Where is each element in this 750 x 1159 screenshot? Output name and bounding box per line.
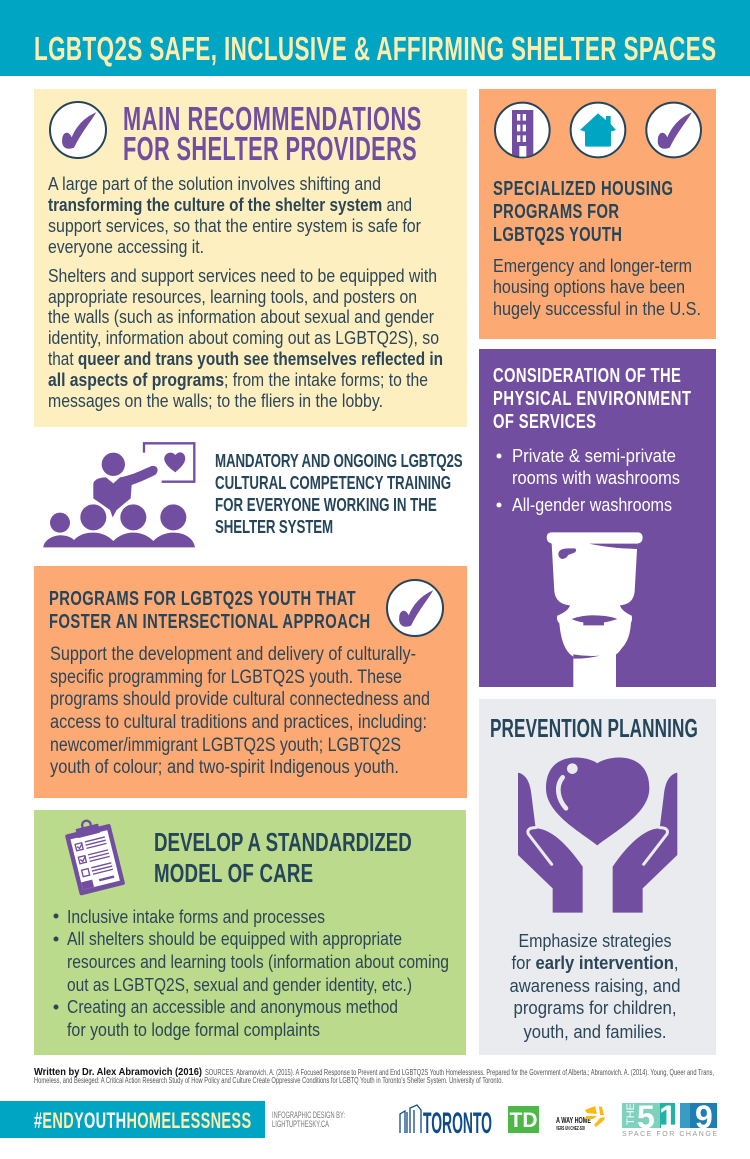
logo: A Way Home: VERS UN CHEZ-SOI [556, 1126, 585, 1132]
list: environment bullets: All-gender washrooms [512, 494, 672, 515]
text: programs body: access to cultural traditions and practices, including: [50, 712, 427, 733]
list: care model bullets: resources and learning tools (information about coming [67, 951, 449, 972]
icon: check mark [646, 103, 701, 157]
title banner [0, 0, 750, 76]
heading: prevention planning: PREVENTION PLANNING [490, 713, 698, 743]
text: prevention body [510, 930, 680, 1042]
heading: specialized housing: PROGRAMS FOR [493, 200, 619, 223]
heading: intersectional programs [49, 587, 370, 633]
text: programs body: specific programming for LGBTQ2S youth. These [50, 667, 402, 688]
text: prevention body: for early intervention, [512, 952, 678, 973]
icon: clipboard [63, 815, 125, 896]
list: environment bullets: rooms with washrooms [512, 467, 680, 488]
heading: standardized model of care: DEVELOP A STANDARDIZED [154, 827, 412, 857]
panel: main recommendations [34, 89, 467, 427]
text: intro paragraph: A large part of the solution involves shifting and [48, 173, 381, 194]
text: housing body: housing options have been [493, 276, 685, 297]
icon: check mark [50, 102, 106, 158]
text: intro paragraph [48, 173, 421, 257]
text: intro paragraph: everyone accessing it. [48, 236, 204, 257]
text: second paragraph: all aspects of programs; from the intake forms; to the [48, 369, 428, 390]
text: second paragraph: the walls (such as information about sexual and gender [48, 306, 434, 327]
text: programs body: youth of colour; and two-spirit Indigenous youth. [50, 757, 399, 778]
text: housing body: Emergency and longer-term [493, 255, 692, 276]
logo: The 519: SPACE FOR CHANGE [622, 1131, 717, 1138]
text: programs body: Support the development and delivery of culturally- [50, 644, 416, 665]
panel: physical environment [479, 349, 716, 687]
list: care model bullets: Creating an accessible and anonymous method [67, 996, 398, 1017]
design credit: INFOGRAPHIC DESIGN BY: [272, 1110, 345, 1121]
text: second paragraph: messages on the walls; to the fliers in the lobby. [48, 390, 383, 411]
icon: presenter with audience [43, 443, 195, 547]
heading: physical environment: OF SERVICES [493, 410, 596, 433]
heading: intersectional programs: PROGRAMS FOR LGBTQ2S YOUTH THAT [49, 587, 356, 610]
text: second paragraph: identity, information about coming out as LGBTQ2S), so [48, 327, 439, 348]
text: housing body [493, 255, 701, 319]
heading: main recommendations [123, 100, 421, 167]
icon: check mark [387, 580, 443, 636]
logo: The 519: 9 [695, 1099, 713, 1135]
text: training heading: SHELTER SYSTEM [215, 517, 333, 538]
logo: Toronto [400, 1105, 492, 1140]
icon: building [495, 103, 550, 157]
text: housing body: hugely successful in the U.S. [493, 298, 701, 319]
list: care model bullets: for youth to lodge formal complaints [67, 1019, 320, 1040]
text: prevention body: programs for children, [514, 997, 676, 1018]
heading: intersectional programs: FOSTER AN INTERSECTIONAL APPROACH [49, 610, 370, 633]
logo: The 519 [622, 1099, 717, 1138]
footer: sources: Homeless, and Besieged: A Critical Action Research Study of How Policy and Culture Create Oppressive Conditions for LGBTQ Youth in Toronto's Shelter System. University of Toronto. [34, 1076, 503, 1085]
list: environment bullets [496, 445, 680, 515]
text: prevention body: youth, and families. [524, 1021, 666, 1042]
design credit [272, 1110, 345, 1130]
list: care model bullets: out as LGBTQ2S, sexual and gender identity, etc.) [67, 974, 412, 995]
icon: house [571, 103, 625, 157]
panel: intersectional programs [34, 566, 467, 798]
panel: cultural competency training [43, 443, 463, 547]
heading: physical environment: PHYSICAL ENVIRONMENT [493, 387, 691, 410]
text: intro paragraph: transforming the culture of the shelter system and [48, 194, 412, 215]
list: care model bullets [54, 906, 449, 1040]
text: training heading: FOR EVERYONE WORKING IN THE [215, 495, 437, 516]
text: programs body [50, 644, 430, 778]
heading: standardized model of care: MODEL OF CARE [154, 858, 313, 888]
hashtag banner: #ENDYOUTHHOMELESSNESS [34, 1108, 251, 1133]
heading: main recommendations: FOR SHELTER PROVIDERS [123, 130, 417, 167]
text: training heading [215, 451, 463, 538]
logo: TD: TD [510, 1109, 538, 1132]
text: second paragraph [48, 265, 443, 411]
heading: specialized housing: SPECIALIZED HOUSING [493, 177, 673, 200]
text: second paragraph: that queer and trans youth see themselves reflected in [48, 348, 443, 369]
logo: The 519: 5 [637, 1099, 655, 1135]
footer: sources [34, 1066, 714, 1085]
text: training heading: MANDATORY AND ONGOING LGBTQ2S [215, 451, 463, 472]
footer: sources: Written by Dr. Alex Abramovich (2016) [34, 1066, 202, 1078]
heading: physical environment [493, 364, 691, 433]
heading: main recommendations: MAIN RECOMMENDATIONS [123, 100, 421, 137]
title banner: LGBTQ2S SAFE, INCLUSIVE & AFFIRMING SHELTER SPACES [34, 30, 716, 67]
text: programs body: programs should provide cultural connectedness and [50, 689, 430, 710]
design credit: LIGHTUPTHESKY.CA [272, 1119, 329, 1130]
text: intro paragraph: support services, so that the entire system is safe for [48, 215, 421, 236]
logo: A Way Home: A WAY HOME [556, 1116, 591, 1125]
text: programs body: newcomer/immigrant LGBTQ2S youth; LGBTQ2S [50, 735, 401, 756]
heading: specialized housing [493, 177, 673, 246]
text: prevention body: awareness raising, and [510, 975, 680, 996]
text: TORONTO [423, 1107, 492, 1140]
panel: prevention planning [479, 699, 716, 1055]
icon: hands holding heart [518, 757, 677, 913]
panel: specialized housing [479, 89, 716, 339]
list: environment bullets: Private & semi-private [512, 445, 676, 466]
hashtag banner [0, 1101, 265, 1138]
list: care model bullets: Inclusive intake forms and processes [67, 906, 325, 927]
text: second paragraph: appropriate resources, learning tools, and posters on [48, 286, 417, 307]
panel: standardized model of care [34, 810, 466, 1055]
text: second paragraph: Shelters and support services need to be equipped with [48, 265, 437, 286]
text: training heading: CULTURAL COMPETENCY TRAINING [215, 473, 451, 494]
list: care model bullets: All shelters should be equipped with appropriate [67, 928, 402, 949]
logo: A Way Home [556, 1106, 605, 1132]
heading: physical environment: CONSIDERATION OF THE [493, 364, 681, 387]
heading: specialized housing: LGBTQ2S YOUTH [493, 223, 622, 246]
heading: standardized model of care [154, 827, 412, 888]
logo: The 519: THE [625, 1103, 637, 1125]
icon: toilet [547, 532, 643, 687]
logo: The 519: 1 [659, 1099, 677, 1135]
text: prevention body: Emphasize strategies [518, 930, 672, 951]
